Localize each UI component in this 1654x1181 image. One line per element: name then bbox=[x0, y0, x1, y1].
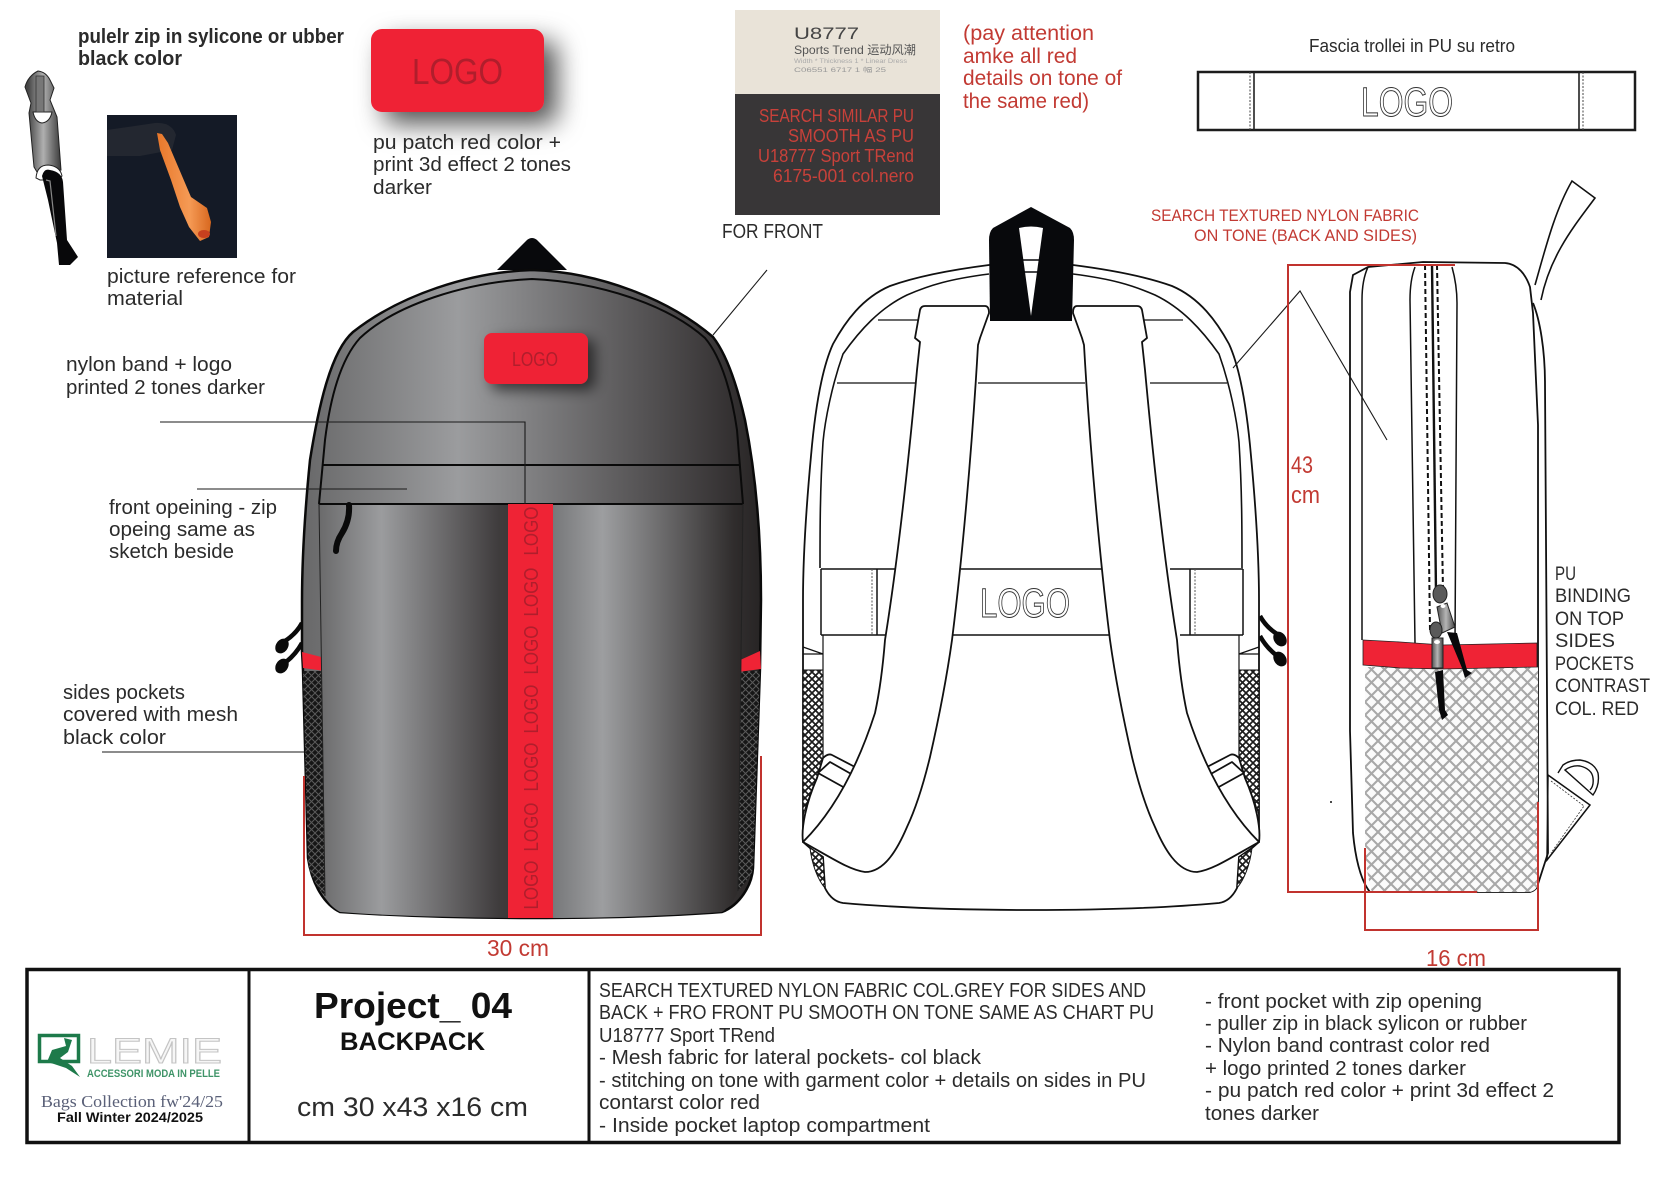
specs column 2: - front pocket with zip opening bbox=[1205, 991, 1482, 1013]
note: red details: the same red) bbox=[963, 90, 1089, 113]
swatch: PU reference chart: Sports Trend 运动风潮 bbox=[794, 42, 916, 57]
project title bbox=[297, 985, 528, 1122]
brand logo: LEMIE bbox=[87, 1032, 222, 1071]
specs column 1: U18777 Sport TRend bbox=[599, 1025, 775, 1047]
specs column 1: - Mesh fabric for lateral pockets- col black bbox=[599, 1047, 982, 1069]
labels: left annotations: nylon band + logo bbox=[66, 354, 232, 376]
body bbox=[302, 270, 761, 918]
horizontal seams bbox=[837, 320, 1227, 383]
note: red details: (pay attention bbox=[963, 22, 1094, 45]
small logo patch bbox=[484, 333, 588, 384]
lower zip puller bbox=[1430, 622, 1448, 720]
specs column 2: - Nylon band contrast color red bbox=[1205, 1035, 1490, 1057]
dimension: 16 cm: 16 cm bbox=[1426, 945, 1486, 971]
labels: left annotations: sides pockets bbox=[63, 682, 185, 704]
note: pu binding: SIDES bbox=[1555, 631, 1615, 652]
band logos: LOGO bbox=[521, 568, 543, 616]
brand logo: ACCESSORI MODA IN PELLE bbox=[87, 1068, 220, 1080]
shoulder strap bbox=[1535, 181, 1595, 300]
band logos bbox=[521, 506, 543, 910]
side meshes bbox=[803, 670, 823, 815]
logo patch: red pu: LOGO bbox=[412, 51, 503, 92]
swatch: PU reference chart: U18777 Sport TRend bbox=[758, 146, 914, 166]
note: textured nylon bbox=[1151, 206, 1419, 245]
zip puller bbox=[336, 505, 349, 551]
note: textured nylon: ON TONE (BACK AND SIDES) bbox=[1194, 226, 1417, 245]
upper zip puller bbox=[1433, 585, 1472, 678]
swatch: PU reference chart: U8777 bbox=[794, 24, 859, 43]
note: pu binding: POCKETS bbox=[1555, 654, 1634, 675]
dot bbox=[1330, 801, 1332, 803]
left strap bbox=[803, 306, 989, 872]
swatch: PU reference chart bbox=[735, 10, 940, 215]
project title: Project_ 04 bbox=[314, 985, 512, 1026]
specs column 2: + logo printed 2 tones darker bbox=[1205, 1058, 1466, 1080]
backpack: front view bbox=[272, 238, 761, 918]
title block table bbox=[27, 969, 1619, 1143]
swatch: PU reference chart: 6175-001 col.nero bbox=[773, 166, 914, 186]
note: red details: amke all red bbox=[963, 45, 1077, 68]
band logos: LOGO bbox=[521, 860, 543, 910]
inner binding bbox=[820, 274, 1242, 568]
leader lines bbox=[102, 270, 1387, 752]
binding and seams bbox=[319, 279, 743, 504]
brand logo: Bags Collection fw'24/25 bbox=[41, 1092, 223, 1111]
logo band bbox=[821, 569, 1243, 635]
dimension: 43 cm: 43 bbox=[1291, 452, 1313, 479]
side trims bbox=[302, 652, 325, 671]
caption: pu patch: pu patch red color + bbox=[373, 132, 561, 154]
side pullers bbox=[272, 623, 302, 676]
project title: BACKPACK bbox=[340, 1028, 485, 1056]
note: pu binding: COL. RED bbox=[1555, 699, 1639, 720]
labels: left annotations: covered with mesh bbox=[63, 704, 238, 726]
caption: picture reference: material bbox=[107, 288, 183, 310]
labels: left annotations: sketch beside bbox=[109, 541, 234, 563]
note: red details: details on tone of bbox=[963, 67, 1122, 90]
specs column 1: SEARCH TEXTURED NYLON FABRIC COL.GREY FOR SIDES AND bbox=[599, 980, 1146, 1002]
backpack: front view: LOGO bbox=[512, 349, 558, 371]
labels: left annotations bbox=[63, 354, 277, 749]
note: pu binding: ON TOP bbox=[1555, 609, 1624, 630]
band logos: LOGO bbox=[521, 506, 543, 556]
labels: left annotations: front opeining - zip bbox=[109, 497, 277, 519]
note: red details bbox=[963, 22, 1122, 113]
specs column 1: contarst color red bbox=[599, 1092, 760, 1114]
specs column 1 bbox=[599, 980, 1154, 1137]
side pocket mesh bbox=[1365, 667, 1538, 892]
label: for front: FOR FRONT bbox=[722, 221, 823, 243]
band logos: LOGO bbox=[521, 742, 543, 792]
panel lines bbox=[1362, 267, 1457, 643]
specs column 2: tones darker bbox=[1205, 1103, 1319, 1125]
logo patch: red pu bbox=[371, 29, 544, 112]
side pullers bbox=[1260, 616, 1290, 669]
specs column 2 bbox=[1205, 991, 1554, 1125]
label: puller zip material bbox=[78, 26, 344, 70]
dimension: 16 cm bbox=[1365, 802, 1538, 971]
d-ring tab bbox=[1558, 760, 1598, 795]
band logos: LOGO bbox=[521, 802, 543, 852]
side trim lines bbox=[803, 635, 1259, 770]
backpack: side view bbox=[1330, 181, 1598, 892]
side meshes bbox=[303, 671, 325, 896]
dimension: 43 cm bbox=[1288, 265, 1477, 892]
icon: zip puller bbox=[25, 71, 78, 265]
specs column 2: - puller zip in black sylicon or rubber bbox=[1205, 1013, 1527, 1035]
labels: left annotations: printed 2 tones darker bbox=[66, 377, 265, 399]
swatch: PU reference chart: SMOOTH AS PU bbox=[788, 126, 914, 146]
handle bbox=[989, 207, 1074, 321]
label: puller zip material: pulelr zip in sylicone or ubber bbox=[78, 26, 344, 48]
labels: left annotations: black color bbox=[63, 727, 166, 749]
backpack: back view bbox=[803, 207, 1290, 910]
caption: pu patch: print 3d effect 2 tones bbox=[373, 154, 571, 176]
note: pu binding: PU bbox=[1555, 564, 1576, 585]
note: pu binding bbox=[1555, 564, 1650, 720]
note: textured nylon: SEARCH TEXTURED NYLON FABRIC bbox=[1151, 206, 1419, 225]
caption: pu patch bbox=[373, 132, 571, 199]
dimension: 43 cm: cm bbox=[1291, 482, 1320, 509]
diagram: trolley band with logo: LOGO bbox=[1361, 79, 1453, 125]
lower panels bbox=[319, 504, 508, 918]
red nylon band bbox=[508, 504, 553, 918]
label: puller zip material: black color bbox=[78, 48, 182, 70]
dimension: 30 cm: 30 cm bbox=[487, 935, 549, 961]
caption: picture reference: picture reference for bbox=[107, 266, 296, 288]
label: trolley band: Fascia trollei in PU su retro bbox=[1309, 36, 1515, 56]
specs column 1: BACK + FRO FRONT PU SMOOTH ON TONE SAME AS CHART PU bbox=[599, 1002, 1154, 1024]
right strap bbox=[1073, 306, 1259, 872]
project title: cm 30 x43 x16 cm bbox=[297, 1092, 528, 1122]
body outline bbox=[803, 265, 1259, 910]
picture: puller reference photo bbox=[107, 115, 237, 258]
caption: picture reference bbox=[107, 266, 296, 310]
band logos: LOGO bbox=[521, 626, 543, 674]
specs column 1: - stitching on tone with garment color + details on sides in PU bbox=[599, 1070, 1146, 1092]
specs column 1: - Inside pocket laptop compartment bbox=[599, 1115, 930, 1137]
diagram: trolley band with logo bbox=[1198, 72, 1635, 130]
caption: pu patch: darker bbox=[373, 177, 432, 199]
labels: left annotations: opeing same as bbox=[109, 519, 255, 541]
brand logo: Fall Winter 2024/2025 bbox=[57, 1109, 203, 1125]
swatch: PU reference chart: SEARCH SIMILAR PU bbox=[759, 106, 914, 126]
zip stitching bbox=[1425, 265, 1443, 630]
handle bbox=[497, 238, 567, 270]
swatch: PU reference chart: Width * Thickness 1 * Linear Dress bbox=[794, 59, 907, 65]
swatch: PU reference chart: C06551 6717 1 幅 25 bbox=[794, 66, 887, 74]
band logos: LOGO bbox=[521, 684, 543, 734]
body bbox=[1350, 262, 1538, 892]
red binding bbox=[1363, 640, 1537, 669]
backpack: back view: LOGO bbox=[980, 580, 1070, 626]
outer back line bbox=[1533, 303, 1548, 884]
note: pu binding: BINDING bbox=[1555, 586, 1631, 607]
brand logo bbox=[40, 1032, 223, 1125]
nylon band area bbox=[319, 465, 743, 504]
dimension: 30 cm bbox=[304, 756, 761, 961]
specs column 2: - pu patch red color + print 3d effect 2 bbox=[1205, 1080, 1554, 1102]
